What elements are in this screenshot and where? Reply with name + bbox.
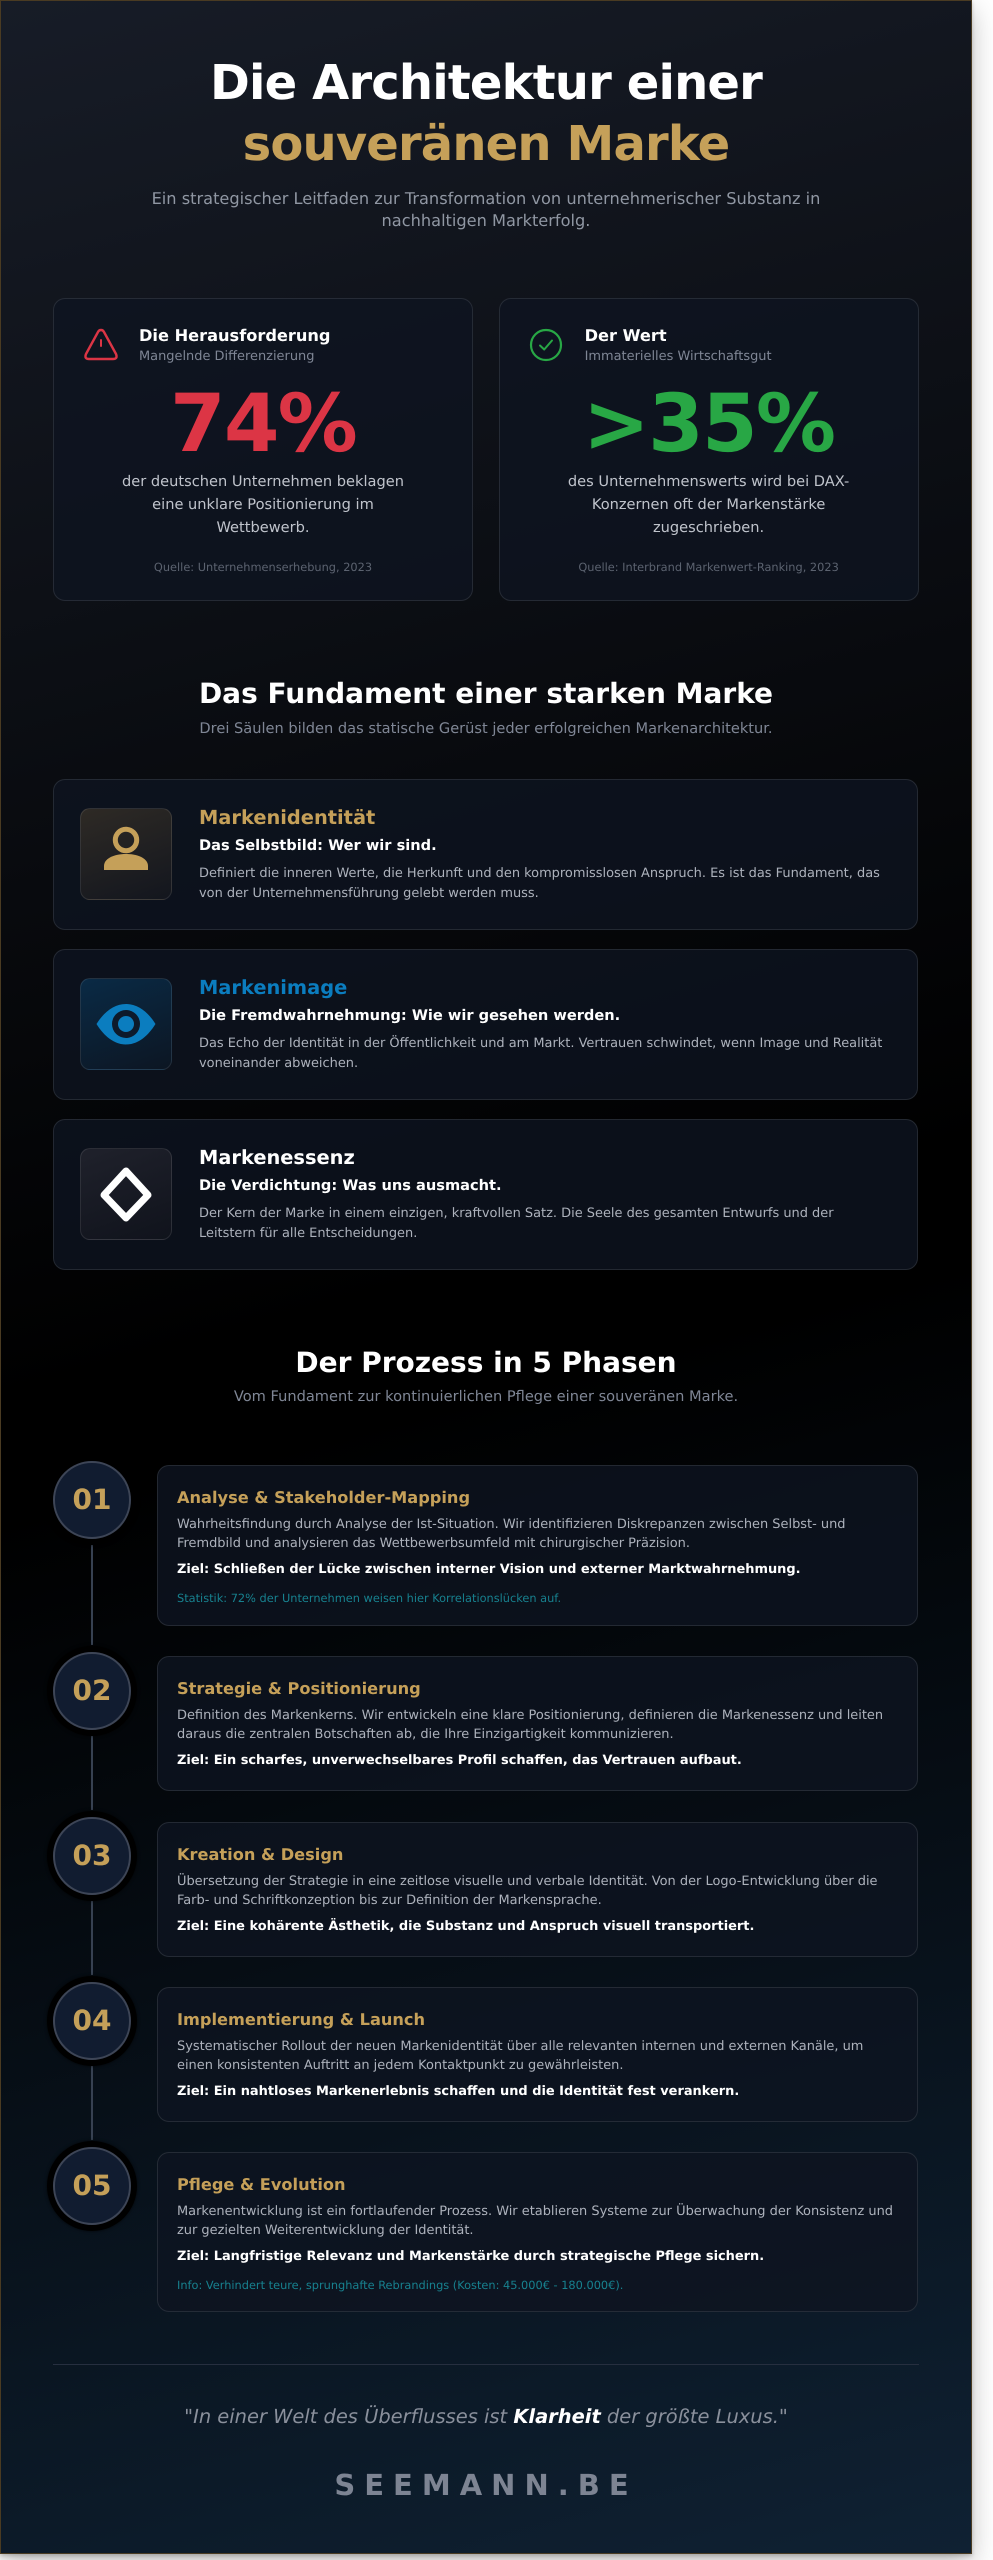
statistic description: Wettbewerb. <box>216 519 310 536</box>
step number 03: 03 <box>73 1839 111 1872</box>
step text <box>177 1873 878 1908</box>
pillar text: Der Kern der Marke in einem einzigen, kraftvollen Satz. Die Seele des gesamten Entwurfs und der <box>199 1206 834 1221</box>
step title: Kreation & Design <box>177 1844 343 1864</box>
statistic >35%: >35% <box>583 377 834 470</box>
step card <box>157 1465 918 1626</box>
step statistic: Statistik: 72% der Unternehmen weisen hier Korrelationslücken auf. <box>177 1591 561 1605</box>
panel: Markenessenz <box>53 1119 918 1270</box>
statistic 74%: 74% <box>170 377 356 470</box>
step number 01: 01 <box>73 1483 111 1516</box>
card heading: Der Wert <box>585 326 667 345</box>
source: Quelle: Interbrand Markenwert-Ranking, 2023 <box>578 560 839 574</box>
pillar text <box>199 866 880 900</box>
step text: einen konsistenten Auftritt an jedem Kontaktpunkt zu gewährleisten. <box>177 2058 623 2073</box>
phase 1 <box>53 1461 918 1645</box>
card subheading: Mangelnde Differenzierung <box>139 349 314 364</box>
step goal: Ziel: Schließen der Lücke zwischen interner Vision und externer Marktwahrnehmung. <box>177 1562 801 1577</box>
title <box>210 55 763 172</box>
statistic description <box>122 473 404 536</box>
panel: Markenimage <box>53 949 918 1100</box>
statistic description: Konzernen oft der Markenstärke <box>592 496 825 513</box>
step card <box>157 1822 918 1957</box>
pillar text: voneinander abweichen. <box>199 1056 358 1070</box>
step number 05: 05 <box>73 2169 111 2202</box>
pillar subtitle: Die Fremdwahrnehmung: Wie wir gesehen werden. <box>199 1007 620 1024</box>
pillar subtitle: Das Selbstbild: Wer wir sind. <box>199 837 437 854</box>
step text: Markenentwicklung ist ein fortlaufender Prozess. Wir etablieren Systeme zur Überwachung der Konsistenz und <box>177 2204 893 2219</box>
step number 04 <box>53 1982 131 2060</box>
pillar text: von der Unternehmensführung gelebt werden muss. <box>199 886 539 900</box>
step goal: Ziel: Langfristige Relevanz und Markenstärke durch strategische Pflege sichern. <box>177 2249 764 2264</box>
title: souveränen Marke <box>243 116 729 172</box>
step text <box>177 2203 893 2238</box>
step goal: Ziel: Ein scharfes, unverwechselbares Profil schaffen, das Vertrauen aufbaut. <box>177 1753 742 1768</box>
step title: Analyse & Stakeholder-Mapping <box>177 1488 470 1506</box>
step text: Fremdbild und analysieren das Wettbewerbsumfeld mit chirurgischer Präzision. <box>177 1536 690 1551</box>
icon: warning triangle <box>84 328 118 360</box>
statistic description: zugeschrieben. <box>653 519 764 536</box>
step text: Definition des Markenkerns. Wir entwickeln eine klare Positionierung, definieren die Markenessenz und leiten <box>177 1708 883 1723</box>
footer quote: "In einer Welt des Überflusses ist Klarheit der größte Luxus." <box>184 2405 788 2428</box>
title: Die Architektur einer <box>210 55 762 111</box>
icon: eye <box>80 978 172 1070</box>
step title: Strategie & Positionierung <box>177 1678 421 1698</box>
step number 02: 02 <box>73 1674 111 1707</box>
panel: Markenidentität <box>53 779 918 930</box>
step text: Farb- und Schriftkonzeption bis zur Definition der Markensprache. <box>177 1893 602 1908</box>
card heading: Die Herausforderung <box>139 326 331 345</box>
icon: check circle <box>530 328 562 362</box>
step text: Systematischer Rollout der neuen Markenidentität über alle relevanten internen und externen Kanäle, um <box>177 2039 863 2054</box>
connector line <box>91 2066 93 2140</box>
step card <box>157 1656 918 1791</box>
subtitle: nachhaltigen Markterfolg. <box>382 211 590 230</box>
step number 04: 04 <box>73 2004 111 2037</box>
step text <box>177 2039 863 2073</box>
statistic description: des Unternehmenswerts wird bei DAX- <box>568 473 849 490</box>
step goal: Ziel: Ein nahtloses Markenerlebnis schaffen und die Identität fest verankern. <box>177 2084 739 2099</box>
step title: Implementierung & Launch <box>177 2010 425 2028</box>
step text: zur gezielten Weiterentwicklung der Identität. <box>177 2223 474 2238</box>
statistic description <box>568 473 849 536</box>
step title: Pflege & Evolution <box>177 2174 346 2194</box>
pillar text: Leitstern für alle Entscheidungen. <box>199 1226 417 1240</box>
pillar title: Markenessenz <box>199 1146 355 1169</box>
connector line <box>91 1736 93 1810</box>
connector line <box>91 1901 93 1975</box>
pillar text: Definiert die inneren Werte, die Herkunft und den kompromisslosen Anspruch. Es ist das Fundament, das <box>199 866 880 881</box>
step text: Übersetzung der Strategie in eine zeitlose visuelle und verbale Identität. Von der Logo-Entwicklung über die <box>177 1874 878 1889</box>
heading: Prozess: Der Prozess in 5 Phasen <box>295 1346 677 1379</box>
subtitle <box>152 189 820 230</box>
step text: daraus die zentralen Botschaften ab, die Ihre Einzigartigkeit kommunizieren. <box>177 1727 674 1742</box>
icon: diamond <box>80 1148 172 1240</box>
step text: Wahrheitsfindung durch Analyse der Ist-Situation. Wir identifizieren Diskrepanzen zwischen Selbst- und <box>177 1517 846 1532</box>
subtitle: Ein strategischer Leitfaden zur Transformation von unternehmerischer Substanz in <box>152 189 820 208</box>
header <box>152 55 820 230</box>
card subheading: Immaterielles Wirtschaftsgut <box>585 349 772 364</box>
step number 01 <box>53 1461 131 1539</box>
statistic description: der deutschen Unternehmen beklagen <box>122 473 404 490</box>
phase 3 <box>47 1810 918 1975</box>
pillar subtitle: Die Verdichtung: Was uns ausmacht. <box>199 1177 502 1194</box>
step number 05 <box>53 2147 131 2225</box>
phase 4 <box>47 1974 918 2140</box>
step text <box>177 1517 846 1551</box>
step number 02 <box>53 1652 131 1730</box>
pillar title: Markenidentität <box>199 806 375 829</box>
statistic description: eine unklare Positionierung im <box>152 496 374 513</box>
icon: person <box>80 808 172 900</box>
step number 03 <box>53 1817 131 1895</box>
pillar text <box>199 1206 834 1240</box>
subheading: Fundament: Drei Säulen bilden das statische Gerüst jeder erfolgreichen Markenarchitektur. <box>199 720 773 737</box>
subheading: Prozess: Vom Fundament zur kontinuierlichen Pflege einer souveränen Marke. <box>234 1388 738 1405</box>
connector line <box>91 1545 93 1645</box>
step card <box>157 2152 918 2312</box>
panel: der Wert <box>499 298 919 601</box>
panel: die Herausforderung <box>53 298 473 601</box>
step text <box>177 1708 883 1742</box>
heading: Fundament: Das Fundament einer starken Marke <box>199 677 773 710</box>
pillar title: Markenimage <box>199 976 347 999</box>
brand: SEEMANN.BE <box>334 2468 638 2502</box>
phase 5 <box>46 2140 918 2312</box>
step card <box>157 1987 918 2122</box>
step goal: Ziel: Eine kohärente Ästhetik, die Substanz und Anspruch visuell transportiert. <box>177 1919 754 1934</box>
pillar text <box>199 1035 882 1070</box>
pillar text: Das Echo der Identität in der Öffentlichkeit und am Markt. Vertrauen schwindet, wenn Image und Realität <box>199 1036 882 1051</box>
phase 2 <box>52 1644 918 1810</box>
step info: Info: Verhindert teure, sprunghafte Rebrandings (Kosten: 45.000€ - 180.000€). <box>177 2278 623 2292</box>
source: Quelle: Unternehmenserhebung, 2023 <box>154 560 372 574</box>
